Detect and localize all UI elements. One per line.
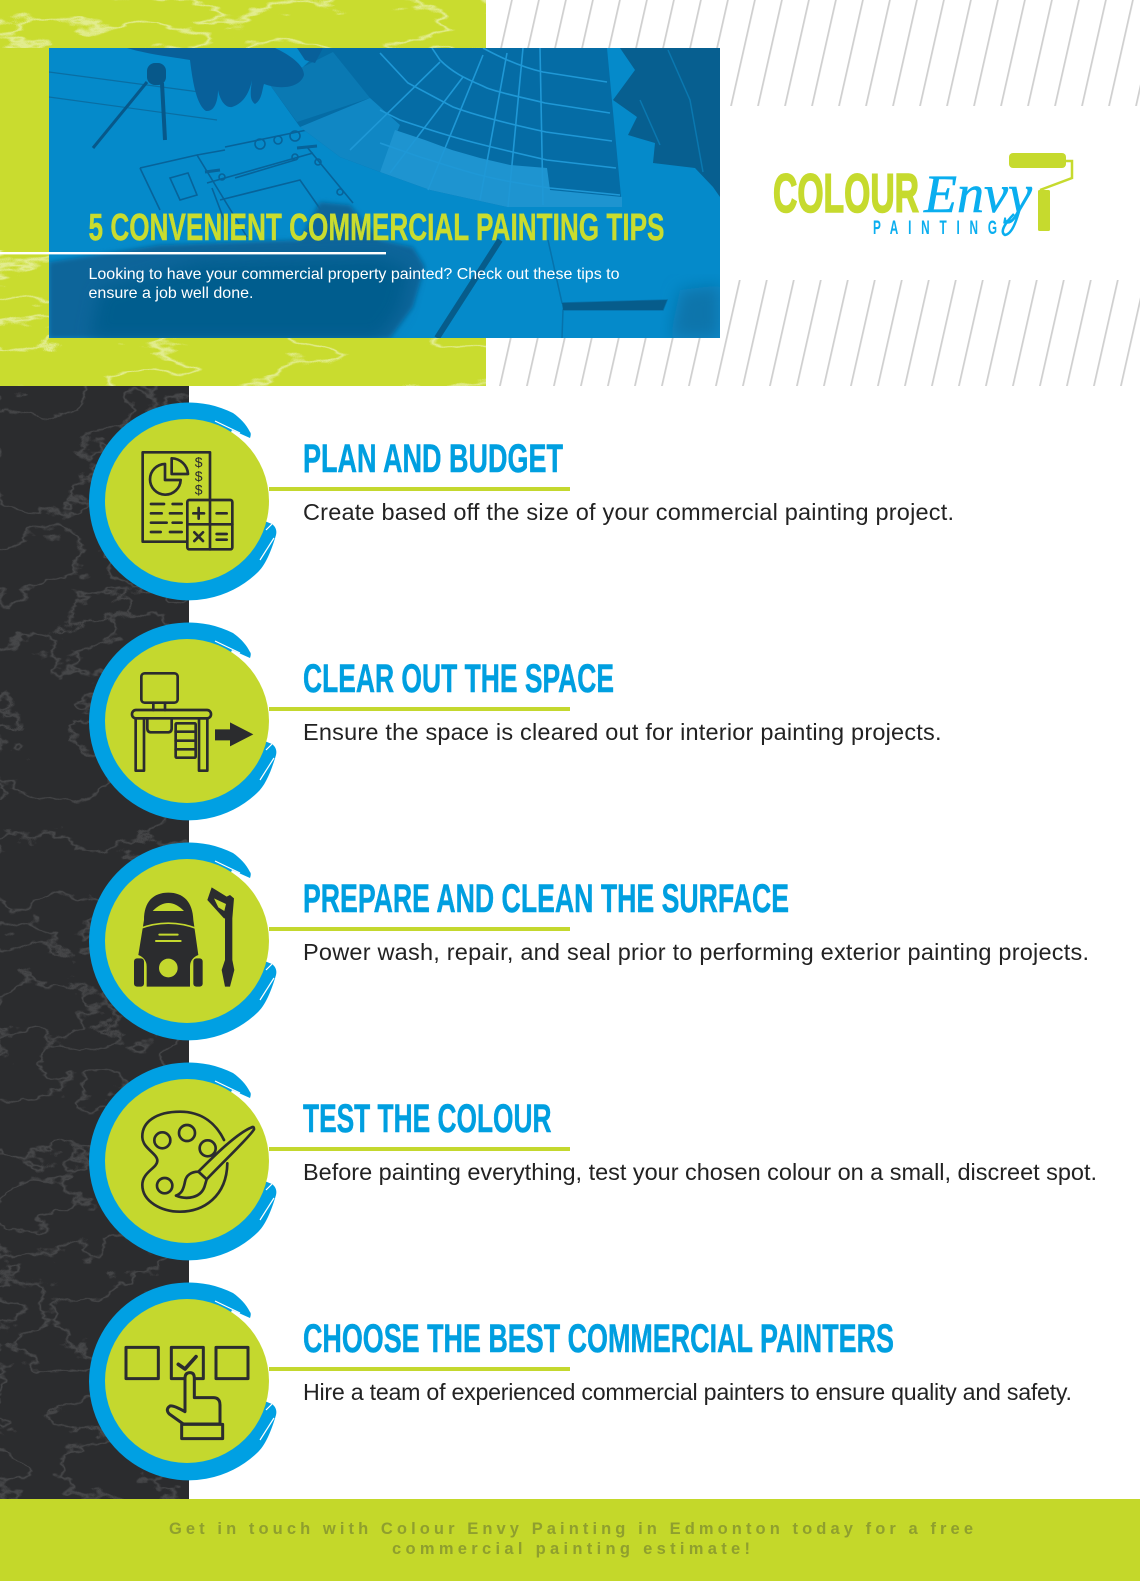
header panel: blue photo of paint swatches (49, 48, 720, 338)
header intro text: Looking to have your commercial property painted? Check out these tips to (88, 266, 620, 283)
icon: palette and brush (142, 1112, 254, 1212)
dark marble strip (0, 386, 189, 1499)
white rule under header title (0, 252, 386, 254)
carpet samples (613, 48, 720, 197)
icon circle 5 (89, 1282, 276, 1480)
icon: desk with arrow (132, 673, 253, 771)
floor plan (140, 130, 353, 237)
footer call to action: Get in touch with Colour Envy Painting in Edmonton today for a free (169, 1520, 973, 1538)
tip 2: clear out the space (89, 622, 942, 820)
paper lines (49, 72, 217, 120)
header intro text (88, 266, 620, 302)
icon: budget sheet and calculator: $ (195, 468, 203, 484)
tip 3: prepare and clean the surface (89, 842, 1089, 1040)
heading: CLEAR OUT THE SPACE (303, 657, 614, 701)
header intro text: ensure a job well done. (88, 285, 254, 302)
logo: Colour Envy Painting (773, 153, 1072, 239)
icon circle 2 (89, 622, 276, 820)
background: green marble panel (0, 0, 486, 386)
pen (437, 240, 500, 338)
header title: 5 CONVENIENT COMMERCIAL PAINTING TIPS (88, 207, 664, 249)
icon circle 1 (89, 402, 276, 600)
icon: pressure washer (134, 887, 234, 987)
heading: PLAN AND BUDGET (303, 437, 563, 481)
description: Before painting everything, test your chosen colour on a small, discreet spot. (303, 1159, 1097, 1185)
rule (269, 1147, 570, 1151)
rule (269, 487, 570, 491)
logo: Colour Envy Painting: Envy (923, 164, 1032, 224)
icon: budget sheet and calculator: $ (195, 482, 203, 498)
icon circle 4 (89, 1062, 276, 1260)
description: Ensure the space is cleared out for interior painting projects. (303, 719, 942, 745)
background: diagonal stripes bottom (486, 280, 1140, 386)
icon: budget sheet and calculator: $ (195, 454, 203, 470)
tip 4: test the colour (89, 1062, 1097, 1260)
footer call to action (169, 1520, 973, 1558)
logo: Colour Envy Painting: COLOUR (773, 162, 919, 224)
footer call to action: commercial painting estimate! (392, 1540, 750, 1558)
rule (269, 1367, 570, 1371)
rule (269, 707, 570, 711)
top hand (127, 48, 304, 111)
sheet and dark bar (548, 240, 667, 338)
bottom hand (49, 202, 425, 338)
background: diagonal stripes top (486, 0, 1140, 106)
icon: hand selecting checkbox (126, 1347, 248, 1439)
fan deck (270, 48, 622, 207)
heading: PREPARE AND CLEAN THE SURFACE (303, 877, 789, 921)
footer band (0, 1499, 1140, 1581)
rule (269, 927, 570, 931)
icon: budget sheet and calculator (143, 452, 232, 549)
icon circle 3 (89, 842, 276, 1040)
paint roller (1009, 153, 1072, 231)
logo: Colour Envy Painting: PAINTING (873, 218, 997, 239)
description: Power wash, repair, and seal prior to performing exterior painting projects. (303, 939, 1089, 965)
compass (93, 63, 166, 148)
tip 1: plan and budget (89, 402, 954, 600)
description: Create based off the size of your commercial painting project. (303, 499, 954, 525)
description: Hire a team of experienced commercial painters to ensure quality and safety. (303, 1379, 1072, 1405)
heading: TEST THE COLOUR (303, 1097, 552, 1141)
tip 5: choose the best commercial painters (89, 1282, 1072, 1480)
